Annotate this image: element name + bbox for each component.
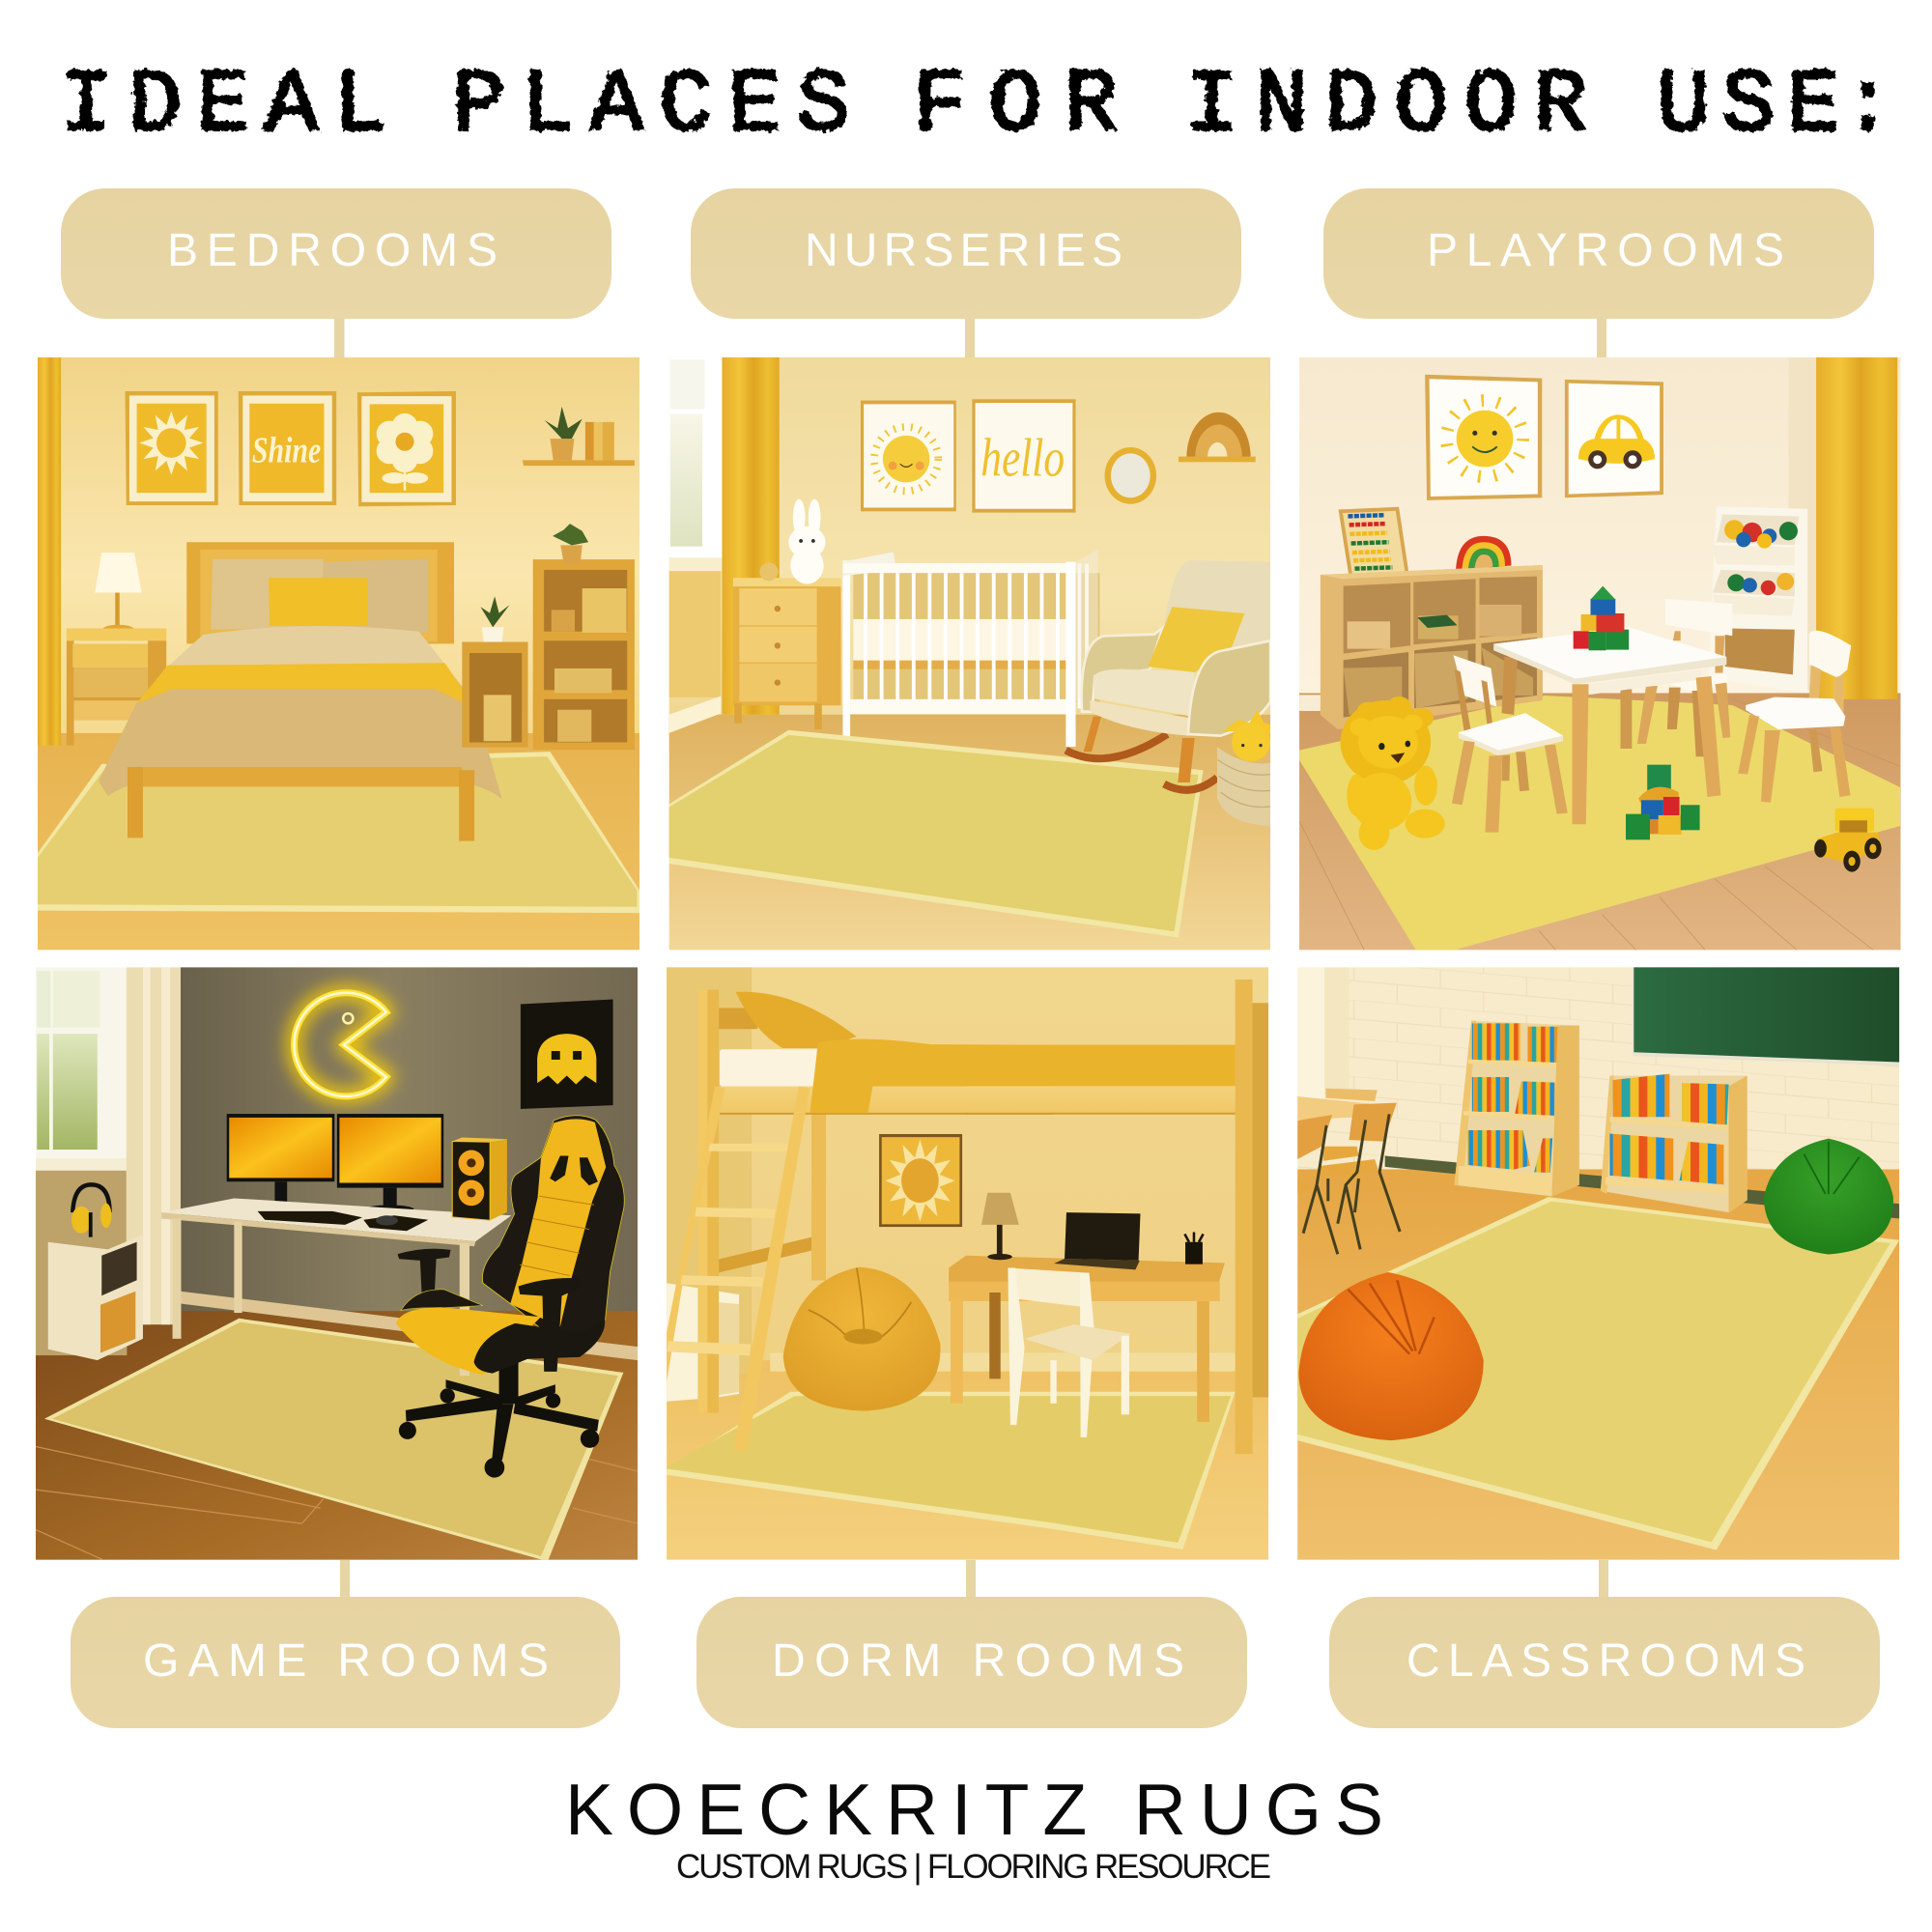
- wall art: flower: [357, 391, 456, 506]
- room floor items: [1299, 565, 1900, 951]
- wall art: hello: hello: [980, 428, 1065, 488]
- abacus: [1341, 509, 1407, 578]
- crib: [842, 550, 1099, 747]
- title: [60, 55, 1894, 156]
- label: game rooms: GAME ROOMS: [143, 1635, 549, 1687]
- speaker: [452, 1138, 507, 1220]
- chair seat: [396, 1290, 606, 1375]
- green bean bag: [1764, 1139, 1893, 1254]
- wall column: [1297, 967, 1350, 1099]
- basket with sun toy: [1217, 710, 1270, 826]
- laptop: [1054, 1212, 1140, 1269]
- chair: left: [1452, 655, 1568, 833]
- floor planks: [1299, 698, 1900, 951]
- baseboard: [181, 1292, 638, 1360]
- rocking chair: [1065, 560, 1270, 790]
- label: dorm rooms: [696, 1560, 1247, 1728]
- chair right armrest: [519, 1278, 580, 1372]
- chair: back: [1637, 599, 1732, 756]
- title: FOR: [913, 55, 1118, 156]
- wall art: shine: [239, 391, 336, 505]
- bed: [99, 626, 502, 841]
- left wall: [667, 967, 752, 1374]
- rug: [1297, 1197, 1899, 1550]
- bookcase: [533, 524, 635, 750]
- cube shelf: [1321, 565, 1543, 729]
- table: [1493, 627, 1726, 824]
- loft bed rails and mattress: [697, 990, 1053, 1413]
- title: INDOOR: [1185, 55, 1587, 156]
- window: [669, 357, 722, 733]
- potted plant and side table: [462, 596, 528, 748]
- nightstand: [67, 629, 166, 746]
- ladder: [667, 1087, 810, 1451]
- bunny toy: [759, 499, 826, 584]
- rug: [1299, 696, 1900, 951]
- brand name: KOECKRITZ RUGS: [565, 1769, 1383, 1850]
- wall art: sun: [879, 1134, 962, 1227]
- label: playrooms: [1323, 188, 1874, 357]
- label: playrooms: PLAYROOMS: [1427, 225, 1784, 276]
- chair left armrest: [398, 1249, 451, 1293]
- tagline: CUSTOM RUGS | FLOORING RESOURCE: [676, 1848, 1271, 1886]
- lion plush: [1340, 696, 1445, 850]
- desk: [161, 1198, 511, 1376]
- panel: game room scene: [36, 967, 638, 1560]
- curtain: [38, 357, 61, 746]
- panel: bedroom scene: [38, 357, 639, 950]
- neon pacman: [294, 993, 386, 1096]
- desk: [949, 1256, 1225, 1422]
- chalkboard: [1633, 967, 1899, 1065]
- dresser: [733, 578, 841, 729]
- wall art: shine: Shine: [252, 430, 321, 470]
- table and chairs: [1297, 1089, 1400, 1254]
- rainbow toy: [1456, 536, 1511, 570]
- baseboard: [1299, 695, 1321, 711]
- monitors: [227, 1114, 443, 1213]
- title: USE: [1657, 55, 1840, 156]
- label: classrooms: CLASSROOMS: [1406, 1635, 1805, 1687]
- storage cube: [667, 1283, 739, 1402]
- wall art: hello: [972, 399, 1076, 513]
- panel: classroom scene: [1297, 967, 1899, 1560]
- wall art: sun: [125, 391, 218, 505]
- rug: [38, 752, 639, 913]
- mirror: [1105, 447, 1156, 504]
- pencil cup: [1184, 1233, 1204, 1264]
- bean bag: [783, 1267, 941, 1411]
- wall art: sun: [861, 401, 956, 511]
- label: dorm rooms: DORM ROOMS: [772, 1635, 1184, 1687]
- label: nurseries: [691, 188, 1241, 357]
- bookcase left: [1454, 1021, 1579, 1196]
- side cabinet and headphones: [48, 1184, 143, 1360]
- label: bedrooms: BEDROOMS: [167, 225, 497, 276]
- desk chair: [1008, 1268, 1131, 1437]
- lamp: [95, 553, 142, 636]
- rug: [44, 1319, 623, 1560]
- wall art: car: [1565, 380, 1663, 497]
- chair: right: [1738, 631, 1851, 803]
- chair base: [399, 1362, 599, 1478]
- panel: playroom scene: [1299, 357, 1900, 951]
- headboard: [186, 542, 454, 643]
- floating shelf with plant and books: [523, 407, 635, 466]
- baseboard: [770, 1353, 1238, 1372]
- window: [36, 967, 127, 1355]
- rainbow shelf: [1179, 412, 1256, 462]
- speaker and gaming chair: [396, 1116, 624, 1478]
- curtain: [1816, 357, 1897, 699]
- title: PLACES: [452, 55, 850, 156]
- title: IDEAL: [60, 55, 386, 156]
- rug: [669, 730, 1204, 938]
- right bed post: [966, 980, 1268, 1454]
- toy truck: [1814, 809, 1882, 872]
- block pile on rug: [1626, 765, 1700, 839]
- label: nurseries: NURSERIES: [805, 225, 1122, 276]
- panel: nursery scene: [669, 357, 1270, 950]
- curtain: [127, 967, 181, 1324]
- rug: [667, 1392, 1236, 1549]
- floor planks: [36, 1446, 638, 1560]
- lamp: [981, 1193, 1019, 1260]
- ghost art: [521, 999, 613, 1109]
- bookcase right: [1601, 1074, 1747, 1212]
- label: game rooms: [71, 1560, 620, 1728]
- panel: dorm room scene: [667, 967, 1268, 1560]
- curtain: [722, 357, 780, 715]
- label: bedrooms: [61, 188, 611, 357]
- chair back: [482, 1116, 624, 1355]
- ball bin: [1709, 506, 1807, 693]
- pillows: [211, 558, 428, 633]
- title: :: [1841, 55, 1894, 156]
- block tower on table: [1574, 586, 1629, 650]
- wall art: sun: [1425, 375, 1542, 500]
- orange bean bag: [1298, 1272, 1484, 1440]
- baseboard: [1385, 1155, 1899, 1218]
- label: classrooms: [1329, 1560, 1880, 1728]
